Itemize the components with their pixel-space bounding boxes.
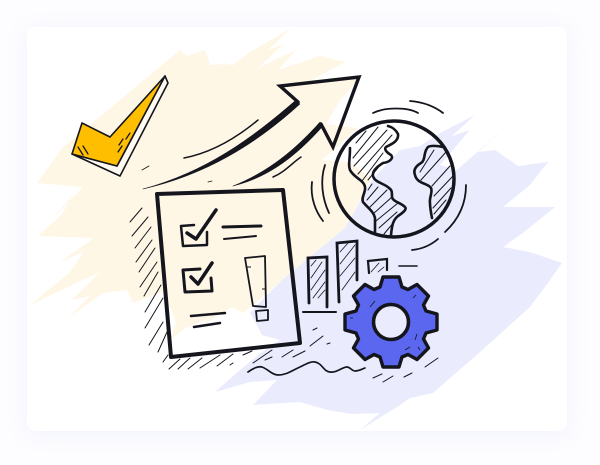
gear icon bbox=[345, 277, 437, 367]
check mark icon bbox=[72, 76, 168, 176]
card panel bbox=[27, 27, 567, 431]
checklist item two bbox=[183, 263, 212, 292]
bar chart bbox=[303, 241, 417, 312]
checklist item one bbox=[181, 210, 261, 246]
globe bbox=[312, 101, 466, 250]
bar one bbox=[308, 257, 327, 307]
text lines bbox=[191, 313, 225, 327]
squiggle line bbox=[248, 362, 365, 375]
bar three bbox=[368, 259, 387, 273]
bar two bbox=[337, 241, 357, 302]
checklist document bbox=[157, 190, 300, 357]
document hatching bbox=[130, 208, 438, 382]
growth arrow bbox=[142, 77, 359, 189]
brush: yellow bbox=[30, 29, 372, 340]
exclamation mark bbox=[245, 256, 268, 321]
motion lines bbox=[312, 101, 466, 250]
brush: lavender bbox=[215, 115, 562, 430]
